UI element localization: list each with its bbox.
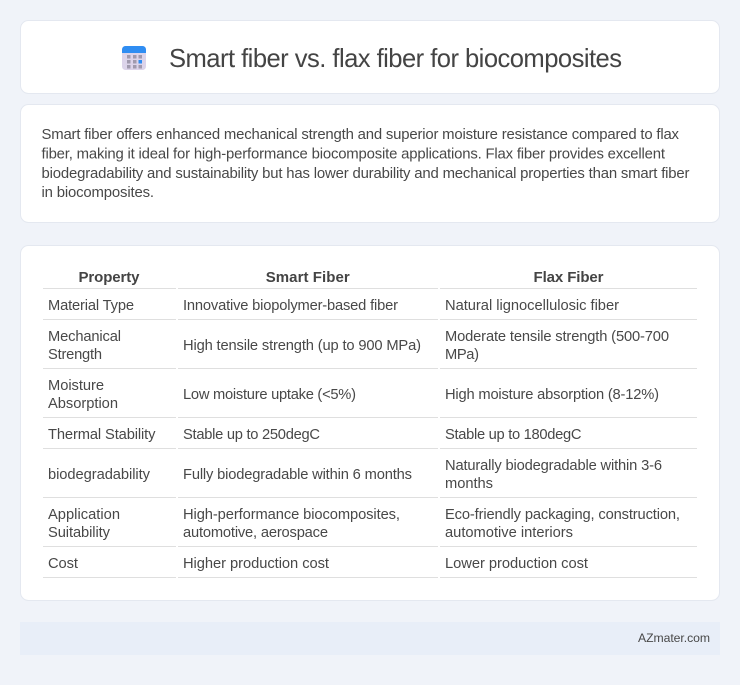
row: mechanical strength: Mechanical [48,329,121,345]
row: biodegradability: biodegradability [48,467,151,483]
row: mechanical strength: Strength [48,347,102,363]
row: moisture absorption: Moisture [48,378,104,394]
row: material type [48,298,619,314]
row: application suitability: automotive, aerospace [183,525,328,541]
row: application suitability: Eco-friendly packaging, construction, [445,507,680,523]
panel: comparison table [20,246,720,600]
row: cost [48,556,588,572]
row: mechanical strength: Moderate tensile strength (500-700 [445,329,669,345]
row: moisture absorption [48,378,659,412]
row: thermal stability: Stable up to 250degC [183,427,320,443]
row: application suitability: automotive interiors [445,525,573,541]
row: application suitability: Application [48,507,120,523]
footer credit: AZmater.com [638,631,710,645]
row: biodegradability: Fully biodegradable within 6 months [183,467,412,483]
table header row: Smart Fiber [266,269,350,286]
row: cost: Higher production cost [183,556,329,572]
row: application suitability [48,507,680,541]
title: Smart fiber vs. flax fiber for biocomposites [169,45,622,73]
row: cost: Lower production cost [445,556,588,572]
row: application suitability: Suitability [48,525,111,541]
row: mechanical strength: High tensile strength (up to 900 MPa) [183,338,421,354]
row: material type: Natural lignocellulosic fiber [445,298,619,314]
table header row: Flax Fiber [534,269,604,286]
row: biodegradability [48,458,662,492]
footer bar [20,622,720,655]
text block: summary paragraph: fiber, making it ideal for high-performance biocomposite applications. Flax fiber provides excellent [42,147,666,163]
row: thermal stability: Stable up to 180degC [445,427,582,443]
panel: title card [20,20,720,94]
row: moisture absorption: High moisture absorption (8-12%) [445,387,659,403]
row: moisture absorption: Low moisture uptake (<5%) [183,387,356,403]
text block: summary paragraph [42,127,690,201]
row: biodegradability: months [445,476,493,492]
row: thermal stability: Thermal Stability [48,427,156,443]
row: mechanical strength [48,329,669,363]
row: biodegradability: Naturally biodegradable within 3-6 [445,458,662,474]
text block: summary paragraph: biodegradability and sustainability but has lower durability and mechanical properties than smart fiber [42,166,690,182]
text block: summary paragraph: Smart fiber offers enhanced mechanical strength and superior moisture resistance compared to flax [42,127,680,143]
table header row [78,269,604,286]
row: moisture absorption: Absorption [48,396,118,412]
row: material type: Material Type [48,298,134,314]
panel: intro summary [20,104,720,222]
row: cost: Cost [48,556,78,572]
icon: calendar [122,46,146,70]
row: mechanical strength: MPa) [445,347,479,363]
row: thermal stability [48,427,582,443]
row: material type: Innovative biopolymer-based fiber [183,298,398,314]
text block: summary paragraph: in biocomposites. [42,185,154,201]
table header row: Property [78,269,140,286]
row: application suitability: High-performance biocomposites, [183,507,400,523]
